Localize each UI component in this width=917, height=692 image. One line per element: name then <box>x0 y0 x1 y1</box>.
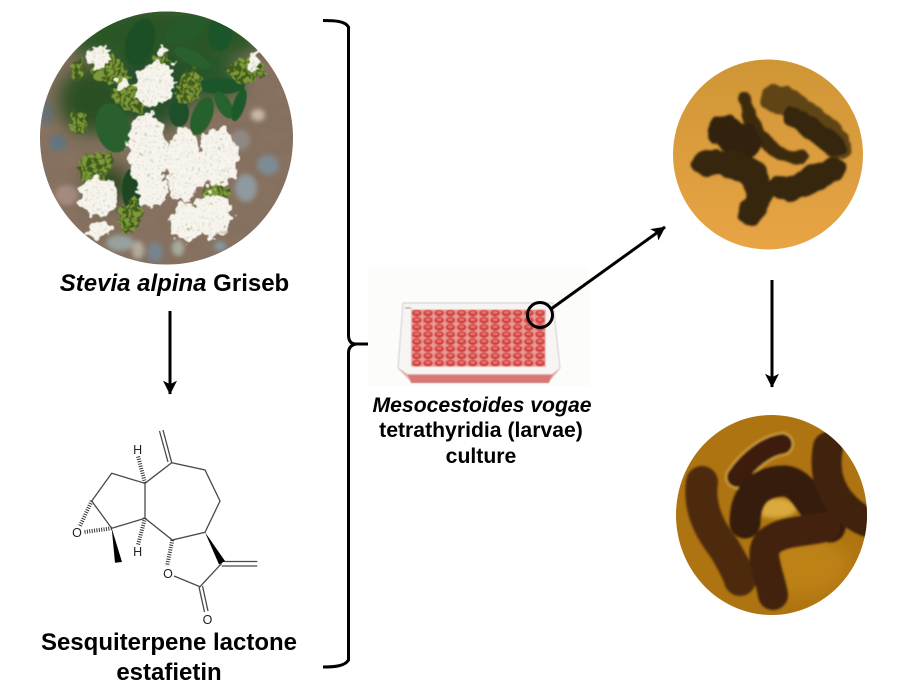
atom labels <box>72 443 213 627</box>
wedge: methyl <box>112 528 122 563</box>
arrow: plant to compound <box>168 311 172 394</box>
chemical structure: estafietin <box>72 430 257 627</box>
caption: plant name: Stevia alpina Griseb <box>60 270 289 297</box>
micrograph: treated larvae <box>672 58 864 251</box>
caption: culture <box>372 394 592 468</box>
white flowers <box>79 45 260 241</box>
photo: Stevia alpina plant <box>40 1 294 265</box>
caption: culture: tetrathyridia (larvae) <box>379 419 583 442</box>
caption: compound name second line: estafietin <box>116 659 222 686</box>
caption: compound name: Sesquiterpene lactone <box>41 629 297 656</box>
atom labels: H <box>133 545 142 559</box>
atom labels: O <box>72 526 82 540</box>
wedge: lactone exocyclic bond <box>205 532 225 564</box>
leaves <box>90 9 250 212</box>
photo: 96-well culture plate <box>368 268 590 386</box>
caption: culture: culture <box>446 445 517 468</box>
arrow: well to larvae <box>551 227 665 309</box>
micrograph: control larvae <box>675 414 872 616</box>
hashed bonds <box>80 456 172 566</box>
marker circle on well <box>528 302 552 328</box>
atom labels: O <box>163 567 173 581</box>
atom labels: H <box>133 443 142 457</box>
green buds <box>71 51 264 236</box>
atom labels: O <box>203 613 213 627</box>
caption: culture: Mesocestoides vogae <box>372 394 592 417</box>
arrow: larvae progression <box>770 280 774 387</box>
bracket <box>323 20 377 667</box>
